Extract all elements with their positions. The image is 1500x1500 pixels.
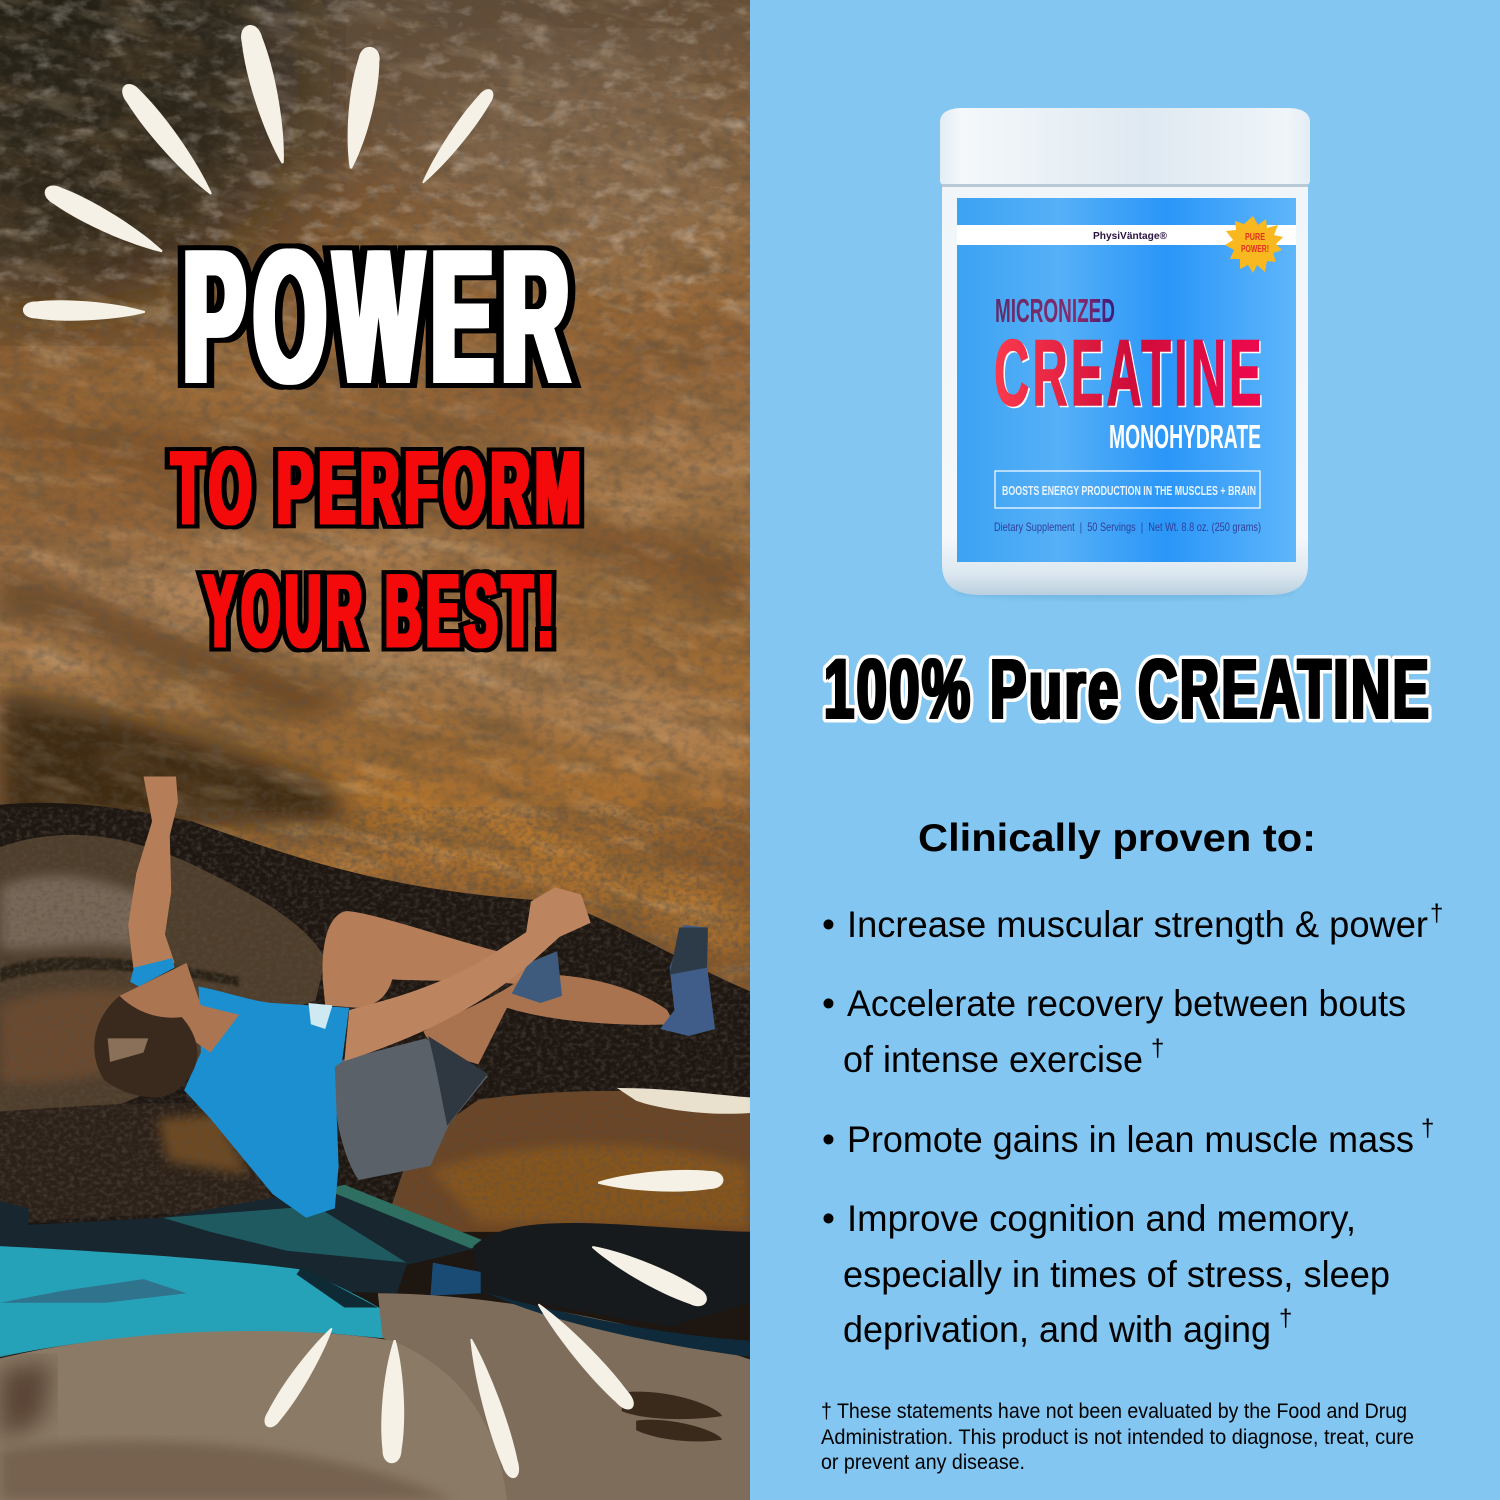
benefit: lean mass: † bbox=[1421, 1115, 1434, 1142]
benefit: cognition: especially in times of stress, sleep bbox=[843, 1254, 1390, 1295]
rock strata bbox=[0, 0, 790, 960]
shoes bbox=[512, 951, 562, 1003]
cave darkness bbox=[0, 803, 750, 1500]
benefit: cognition: † bbox=[1279, 1305, 1292, 1332]
benefit: cognition bbox=[822, 1198, 1390, 1350]
headline: to perform: TO PERFORM bbox=[170, 432, 584, 545]
benefit: cognition: Improve cognition and memory, bbox=[847, 1198, 1356, 1239]
heading: clinically proven: Clinically proven to: bbox=[918, 817, 1316, 860]
headline: your best: YOUR BEST! bbox=[199, 553, 555, 668]
headline: POWER: POWER bbox=[186, 213, 580, 421]
headline: POWER: POWER bbox=[175, 213, 569, 421]
heading: 100% pure creatine: 100% Pure CREATINE bbox=[825, 642, 1432, 736]
badge: pure power: PURE bbox=[1245, 232, 1265, 243]
benefit: recovery: • bbox=[822, 983, 835, 1024]
benefit: lean mass: • bbox=[822, 1119, 835, 1160]
heading: 100% pure creatine: 100% Pure CREATINE bbox=[823, 642, 1430, 736]
benefit: cognition: deprivation, and with aging bbox=[843, 1309, 1271, 1350]
badge: pure power: POWER! bbox=[1241, 244, 1269, 255]
straight leg bbox=[423, 974, 674, 1064]
label: creatine: CREATINE bbox=[996, 321, 1266, 427]
benefit: recovery: Accelerate recovery between bouts bbox=[847, 983, 1406, 1024]
jar body bbox=[942, 180, 1308, 595]
footnote: † These statements have not been evaluated by the Food and Drug bbox=[821, 1399, 1407, 1423]
headline: your best: YOUR BEST! bbox=[205, 553, 561, 668]
rear opening ground bbox=[383, 1091, 750, 1232]
headline: to perform: TO PERFORM bbox=[176, 432, 590, 545]
benefit: recovery bbox=[822, 983, 1406, 1080]
boulders bbox=[378, 1293, 750, 1500]
raised arm bbox=[128, 776, 178, 972]
rubble ground bbox=[0, 1103, 277, 1222]
panel: climbing photo bbox=[0, 0, 750, 1500]
label: claim box bbox=[995, 471, 1260, 508]
benefit: strength: Increase muscular strength & power bbox=[847, 904, 1428, 945]
shorts bbox=[334, 1038, 488, 1180]
icon: starburst rays bbox=[23, 22, 724, 1481]
jar label bbox=[957, 198, 1296, 562]
label: monohydrate: MONOHYDRATE bbox=[1109, 418, 1261, 455]
headline: to perform: TO PERFORM bbox=[167, 432, 581, 545]
footnote: or prevent any disease. bbox=[821, 1450, 1025, 1474]
headline: POWER: POWER bbox=[191, 213, 585, 421]
label: servings line: Dietary Supplement | 50 Servings | Net Wt. 8.8 oz. (250 grams) bbox=[994, 520, 1261, 534]
lower scene bbox=[0, 776, 750, 1500]
headline: POWER: POWER bbox=[180, 213, 574, 421]
panel: blue product background bbox=[750, 0, 1500, 1500]
cave back rock bbox=[0, 835, 325, 1112]
label: creatine: CREATINE bbox=[994, 320, 1265, 425]
label: claim box: BOOSTS ENERGY PRODUCTION IN THE MUSCLES + BRAIN bbox=[1002, 484, 1256, 498]
jar lid bbox=[940, 108, 1310, 185]
product jar bbox=[940, 108, 1310, 600]
light opening bbox=[617, 1088, 750, 1114]
benefit: strength: † bbox=[1430, 900, 1443, 927]
footnote: Administration. This product is not intended to diagnose, treat, cure bbox=[821, 1425, 1414, 1449]
footnote bbox=[821, 1399, 1414, 1474]
front arm bbox=[344, 887, 591, 1061]
brand: PhysiVäntage® bbox=[1093, 230, 1167, 242]
label: micronized: MICRONIZED bbox=[995, 292, 1115, 329]
headline: your best: YOUR BEST! bbox=[208, 553, 564, 668]
head bbox=[120, 963, 239, 1053]
heading: 100% pure creatine: 100% Pure CREATINE bbox=[822, 642, 1429, 736]
headline: POWER: POWER bbox=[183, 213, 577, 421]
shirt bbox=[184, 986, 349, 1218]
headline: your best: YOUR BEST! bbox=[202, 553, 558, 668]
headline: to perform: TO PERFORM bbox=[173, 432, 587, 545]
headline: POWER: POWER bbox=[183, 213, 577, 421]
climber bbox=[94, 776, 715, 1218]
benefits list bbox=[822, 900, 1443, 1350]
heading: 100% pure creatine: 100% Pure CREATINE bbox=[826, 642, 1433, 736]
benefit: cognition: • bbox=[822, 1198, 835, 1239]
hair bbox=[94, 996, 197, 1097]
crash pads bbox=[0, 1185, 485, 1293]
bent leg bbox=[322, 911, 533, 1008]
benefit: recovery: of intense exercise bbox=[843, 1039, 1143, 1080]
benefit: lean mass: Promote gains in lean muscle mass bbox=[847, 1119, 1414, 1160]
badge: pure power bbox=[1225, 216, 1283, 273]
benefit: recovery: † bbox=[1151, 1035, 1164, 1062]
benefit: strength: • bbox=[822, 904, 835, 945]
